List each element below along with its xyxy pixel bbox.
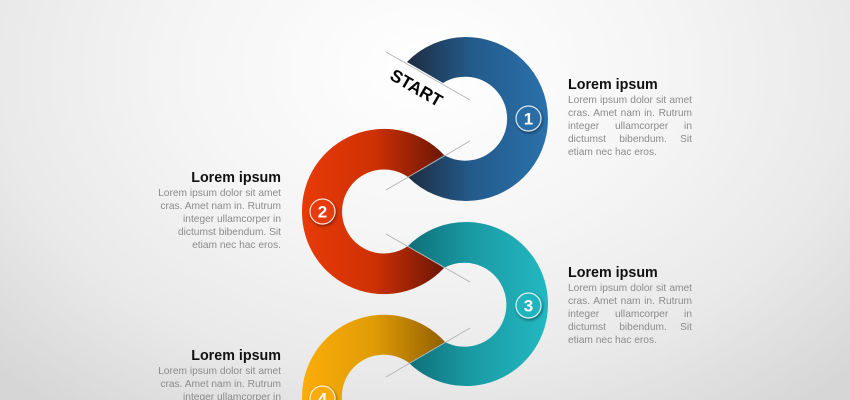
text block 3: integer ullamcorper in	[568, 309, 692, 320]
text block 1: etiam nec hac eros.	[568, 147, 657, 158]
text block 2: etiam nec hac eros.	[192, 240, 281, 251]
text block 1: integer ullamcorper in	[568, 121, 692, 132]
text block 4	[158, 348, 281, 400]
badge 1	[516, 106, 541, 131]
badge 2: 2	[318, 202, 327, 222]
text block 4: cras. Amet nam in. Rutrum	[160, 379, 281, 390]
text block 2: cras. Amet nam in. Rutrum	[160, 201, 281, 212]
badge 4	[308, 384, 338, 400]
text block 1	[568, 77, 692, 158]
text block 3: Lorem ipsum dolor sit amet	[568, 283, 692, 294]
divider lines	[386, 52, 470, 377]
segment 4: orange ring	[302, 315, 445, 400]
text block 3	[568, 265, 692, 346]
badge 1: 1	[524, 110, 533, 128]
text block 3: cras. Amet nam in. Rutrum	[568, 296, 692, 307]
text block 2: Lorem ipsum dolor sit amet	[158, 188, 281, 199]
text block 3: dictumst bibendum. Sit	[568, 322, 692, 333]
text block 4: Lorem ipsum	[191, 348, 281, 364]
segment 1: blue ring	[407, 37, 548, 201]
text block 3: Lorem ipsum	[568, 265, 658, 281]
text block 1: Lorem ipsum	[568, 77, 658, 93]
text block 4: Lorem ipsum dolor sit amet	[158, 366, 281, 377]
segment 2: red ring	[302, 129, 444, 294]
badge 3	[516, 293, 541, 318]
text block 2: integer ullamcorper in	[183, 214, 281, 225]
badge 3: 3	[524, 296, 533, 316]
text block 1: Lorem ipsum dolor sit amet	[568, 95, 692, 106]
badge 2	[310, 199, 335, 224]
text block 2: Lorem ipsum	[191, 170, 281, 186]
segment 3: teal ring	[408, 222, 548, 386]
text block 2: dictumst bibendum. Sit	[178, 227, 281, 238]
start label: START	[387, 65, 446, 111]
text block 1: cras. Amet nam in. Rutrum	[568, 108, 692, 119]
text block 3: etiam nec hac eros.	[568, 335, 657, 346]
text block 2	[158, 170, 281, 251]
text block 1: dictumst bibendum. Sit	[568, 134, 692, 145]
